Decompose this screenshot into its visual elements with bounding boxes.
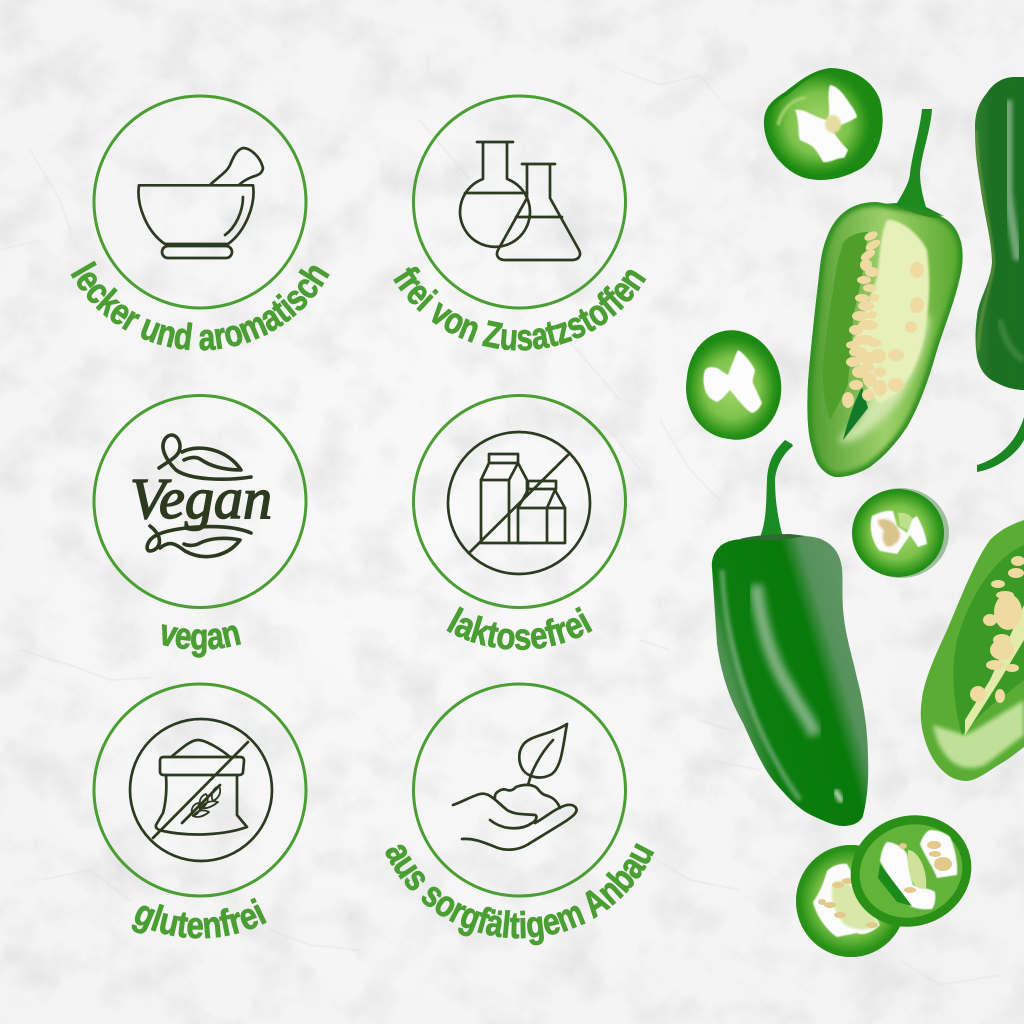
photo: jalapeño slice, top (764, 68, 883, 180)
badge: lecker und aromatisch (70, 94, 330, 351)
photo: halved jalapeño with seeds, bottom right (915, 515, 1024, 785)
icon: vegan lettering with leaves: Vegan (130, 466, 272, 531)
icon: mortar and pestle (139, 148, 263, 258)
badge: laktosefrei (412, 394, 627, 650)
icon: vegan lettering with leaves (130, 435, 272, 557)
label: lecker und aromatisch: lecker und aromatisch (70, 260, 330, 351)
icon: hand holding seedling (453, 724, 577, 850)
label: aus sorgfältigem Anbau: aus sorgfältigem Anbau (386, 842, 654, 946)
label: frei von Zusatzstoffen: frei von Zusatzstoffen (393, 266, 646, 351)
photo: whole jalapeño pepper, centre (712, 440, 868, 826)
photo: halved jalapeño with seeds, top (807, 109, 963, 477)
badge: vegan (92, 394, 308, 658)
photo: whole jalapeño pepper, right edge (975, 77, 1024, 472)
badge: aus sorgfältigem Anbau (386, 682, 654, 946)
badge: glutenfrei (92, 682, 308, 939)
label: vegan: vegan (162, 624, 242, 658)
photo: jalapeño slice, left (678, 323, 790, 447)
photo: jalapeño slice, middle (852, 488, 949, 578)
icon: crossed-out flour sack (130, 719, 272, 861)
icon: crossed-out milk cartons (448, 432, 590, 574)
badge: frei von Zusatzstoffen (393, 94, 646, 351)
label: glutenfrei: glutenfrei (132, 898, 267, 939)
icon: laboratory flasks (460, 142, 580, 260)
photo: jalapeño slice, bottom right (835, 798, 987, 944)
photo: jalapeño slice, bottom left (796, 845, 906, 957)
label: laktosefrei: laktosefrei (446, 606, 592, 650)
